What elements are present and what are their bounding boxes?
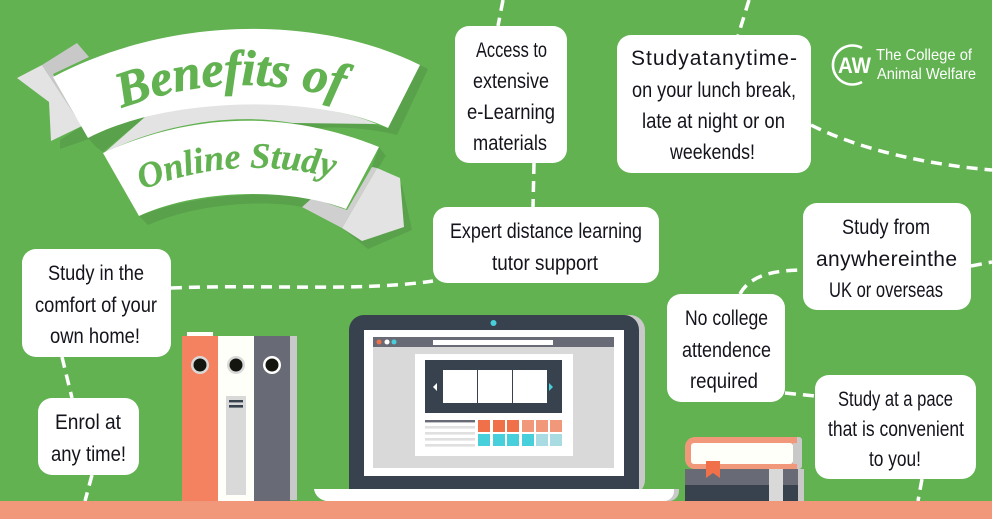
icon: laptop	[314, 315, 679, 501]
callout: no college attendance: attendence	[682, 339, 771, 362]
callout: e-Learning materials: extensive	[473, 70, 549, 93]
icon: stacked books	[685, 437, 804, 501]
callout: study at a pace	[815, 375, 976, 479]
banner ribbon: lower	[103, 121, 379, 216]
callout: study at any time: late at night or on	[642, 110, 785, 133]
title banner	[17, 28, 428, 249]
callout: e-Learning materials	[455, 26, 567, 163]
desk surface	[0, 501, 992, 519]
callout: study from anywhere: Study from	[842, 216, 930, 239]
logo: The College of Animal Welfare	[833, 45, 976, 85]
heading: Online Study: Online Study	[138, 144, 338, 188]
heading: Online Study	[138, 144, 338, 188]
callout: comfort of home: comfort of your	[35, 294, 157, 317]
callout: enrol at any time	[38, 398, 139, 475]
callout: study from anywhere	[803, 203, 971, 310]
callout: comfort of home: Study in the	[48, 262, 144, 285]
callout: e-Learning materials: e-Learning	[467, 101, 555, 124]
icon: ring binders	[182, 332, 297, 501]
callout: expert tutor support	[433, 207, 659, 283]
callout: study at a pace: to you!	[869, 448, 921, 471]
callout: comfort of home: own home!	[50, 325, 140, 348]
callout: enrol at any time: Enrol at	[55, 411, 121, 434]
logo: The College of Animal Welfare: Animal Welfare	[877, 66, 976, 83]
banner ribbon: upper	[53, 29, 420, 138]
callout: expert tutor support: Expert distance learning	[450, 220, 642, 243]
callout: study at any time: on your lunch break,	[632, 79, 796, 102]
logo: The College of Animal Welfare: The College of	[876, 47, 973, 64]
callout: enrol at any time: any time!	[51, 443, 126, 466]
callout: study at any time: Studyatanytime-	[631, 47, 797, 70]
callout: study from anywhere: anywhereinthe	[816, 248, 957, 271]
callout: e-Learning materials: materials	[473, 132, 547, 155]
callout: study at any time	[617, 35, 811, 173]
callout: study at any time: weekends!	[669, 141, 755, 164]
callout: no college attendance: required	[690, 370, 758, 393]
logo: The College of Animal Welfare: AW	[838, 53, 871, 78]
callout: no college attendance	[667, 294, 785, 402]
callout: comfort of home	[22, 249, 171, 357]
callout: e-Learning materials: Access to	[476, 39, 547, 62]
callout: no college attendance: No college	[685, 307, 768, 330]
heading: Benefits of: Benefits of	[116, 49, 354, 108]
callout: study at a pace: Study at a pace	[838, 388, 953, 411]
callout: expert tutor support: tutor support	[492, 252, 598, 275]
callout: study at a pace: that is convenient	[828, 418, 964, 441]
callout: study from anywhere: UK or overseas	[829, 279, 943, 302]
